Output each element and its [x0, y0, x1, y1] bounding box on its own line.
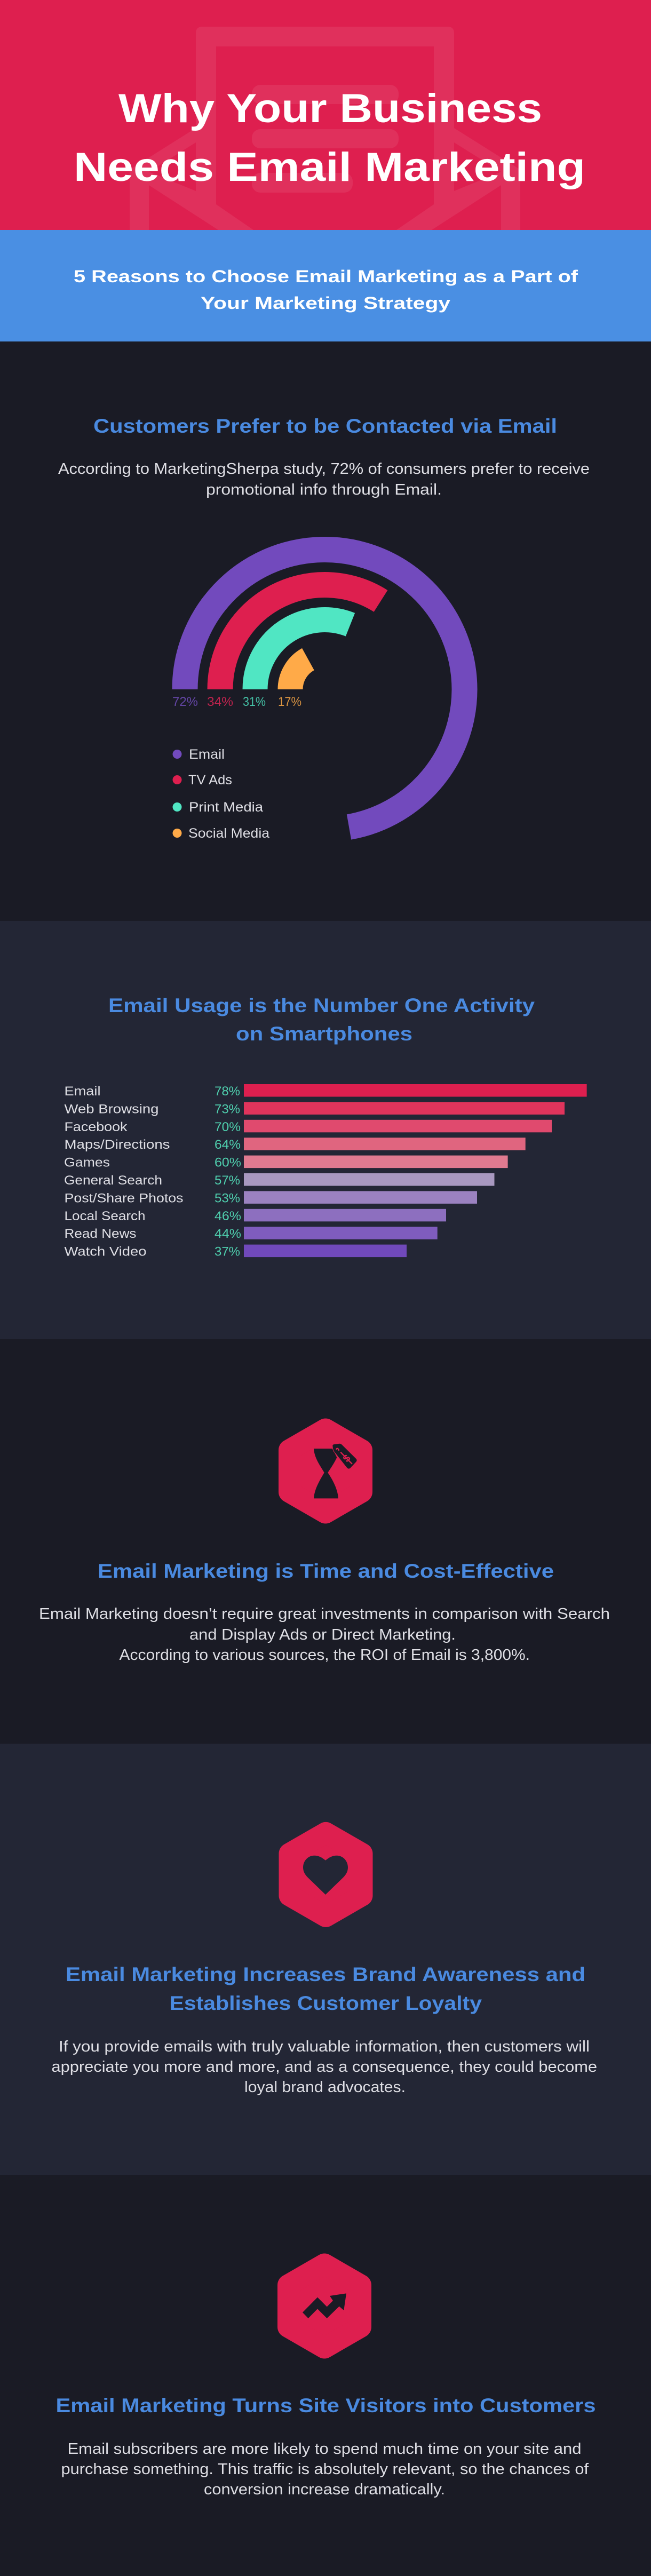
- arc: tv ads 34%: [220, 585, 381, 689]
- bar: watch video: 37%: [215, 1245, 240, 1259]
- bar: web browsing: Web Browsing: [64, 1102, 159, 1116]
- bar: email: Email: [64, 1084, 100, 1099]
- bar: read news: 44%: [215, 1227, 241, 1241]
- title: [74, 86, 585, 190]
- heading: on Smartphones: [236, 1023, 412, 1045]
- text block: conversion increase dramatically.: [204, 2481, 445, 2498]
- text block: promotional info through Email.: [206, 481, 442, 498]
- text block: loyal brand advocates.: [244, 2079, 406, 2096]
- bar: general search: General Search: [64, 1173, 162, 1188]
- bar: email: [64, 1084, 587, 1099]
- panel: title banner: [0, 0, 651, 230]
- bar: local search: [64, 1209, 446, 1223]
- panel: subtitle band: [0, 230, 651, 341]
- icon: heart: [289, 1833, 362, 1917]
- icon: hourglass with price tag: [289, 1429, 362, 1513]
- subtitle: 5 Reasons to Choose Email Marketing as a Part of: [74, 267, 578, 286]
- text block: According to various sources, the ROI of Email is 3,800%.: [120, 1647, 530, 1664]
- heading: Email Usage is the Number One Activity: [108, 995, 535, 1016]
- bar: email: 78%: [215, 1084, 240, 1099]
- bar: maps/directions: 64%: [215, 1138, 241, 1152]
- bar: read news: [64, 1227, 438, 1241]
- panel: visitors into customers: [0, 2175, 651, 2576]
- bar: general search: [64, 1173, 494, 1188]
- bar: watch video: Watch Video: [64, 1245, 146, 1259]
- icon: trending arrow: [288, 2264, 361, 2348]
- bar: facebook: Facebook: [64, 1120, 128, 1134]
- bar: games: Games: [64, 1156, 110, 1170]
- bar: games: 60%: [215, 1156, 241, 1170]
- bar: read news: Read News: [64, 1227, 137, 1241]
- arc: social media 17%: [290, 659, 308, 689]
- panel: email usage on smartphones: [0, 921, 651, 1339]
- panel: customers prefer email: [0, 341, 651, 921]
- heading: Email Marketing is Time and Cost-Effective: [98, 1560, 554, 1582]
- text block: purchase something. This traffic is absolutely relevant, so the chances of: [61, 2461, 589, 2478]
- bar: post/share photos: [64, 1191, 477, 1205]
- chart values: 34%: [207, 695, 233, 709]
- bar: general search: 57%: [215, 1173, 240, 1188]
- heading: [66, 1963, 585, 2014]
- text block: According to MarketingSherpa study, 72% of consumers prefer to receive: [58, 460, 590, 478]
- heading: Email Marketing Increases Brand Awareness and: [66, 1963, 585, 1985]
- heading: Customers Prefer to be Contacted via Email: [93, 415, 557, 437]
- legend: TV Ads: [188, 773, 232, 788]
- bar: web browsing: 73%: [215, 1102, 240, 1116]
- bar chart: [64, 1084, 587, 1259]
- bar: games: [64, 1156, 508, 1170]
- text block: Email Marketing doesn’t require great investments in comparison with Search: [39, 1605, 610, 1623]
- legend: Social Media: [188, 826, 269, 841]
- icon: hourglass with price tag: $: [341, 1453, 353, 1465]
- text block: [51, 2038, 597, 2096]
- panel: time and cost-effective: [0, 1339, 651, 1744]
- arc: print media 31%: [255, 620, 350, 689]
- chart values: 17%: [278, 695, 301, 709]
- bar: facebook: [64, 1120, 552, 1134]
- subtitle: Your Marketing Strategy: [201, 293, 450, 313]
- legend: [173, 747, 269, 841]
- panel: brand awareness and loyalty: [0, 1744, 651, 2175]
- bar: watch video: [64, 1245, 407, 1259]
- text block: Email subscribers are more likely to spend much time on your site and: [67, 2440, 582, 2458]
- bar: local search: Local Search: [64, 1209, 145, 1223]
- legend: Print Media: [189, 800, 263, 815]
- subtitle: [74, 267, 578, 313]
- text block: and Display Ads or Direct Marketing.: [189, 1626, 456, 1643]
- legend: Email: [189, 747, 225, 762]
- bar: web browsing: [64, 1102, 565, 1116]
- bar: facebook: 70%: [215, 1120, 241, 1134]
- text block: [39, 1605, 610, 1664]
- heading: Establishes Customer Loyalty: [170, 1992, 482, 2014]
- chart values: 72%: [172, 695, 198, 709]
- bar: maps/directions: [64, 1138, 526, 1152]
- text block: appreciate you more and more, and as a consequence, they could become: [51, 2058, 597, 2076]
- radial bar chart: [185, 550, 465, 827]
- title: Needs Email Marketing: [74, 145, 585, 190]
- bar: local search: 46%: [215, 1209, 241, 1223]
- heading: Email Marketing Turns Site Visitors into Customers: [55, 2395, 596, 2416]
- chart values: 31%: [243, 695, 266, 709]
- title: Why Your Business: [118, 86, 542, 131]
- icon: envelope watermark: [130, 27, 520, 230]
- text block: [61, 2440, 589, 2498]
- chart values: [172, 695, 301, 709]
- text block: [58, 460, 590, 498]
- bar: post/share photos: 53%: [215, 1191, 240, 1205]
- heading: [108, 995, 535, 1045]
- arc: email 72%: [185, 550, 465, 827]
- bar: maps/directions: Maps/Directions: [64, 1138, 170, 1152]
- bar: post/share photos: Post/Share Photos: [64, 1191, 184, 1205]
- text block: If you provide emails with truly valuable information, then customers will: [59, 2038, 590, 2055]
